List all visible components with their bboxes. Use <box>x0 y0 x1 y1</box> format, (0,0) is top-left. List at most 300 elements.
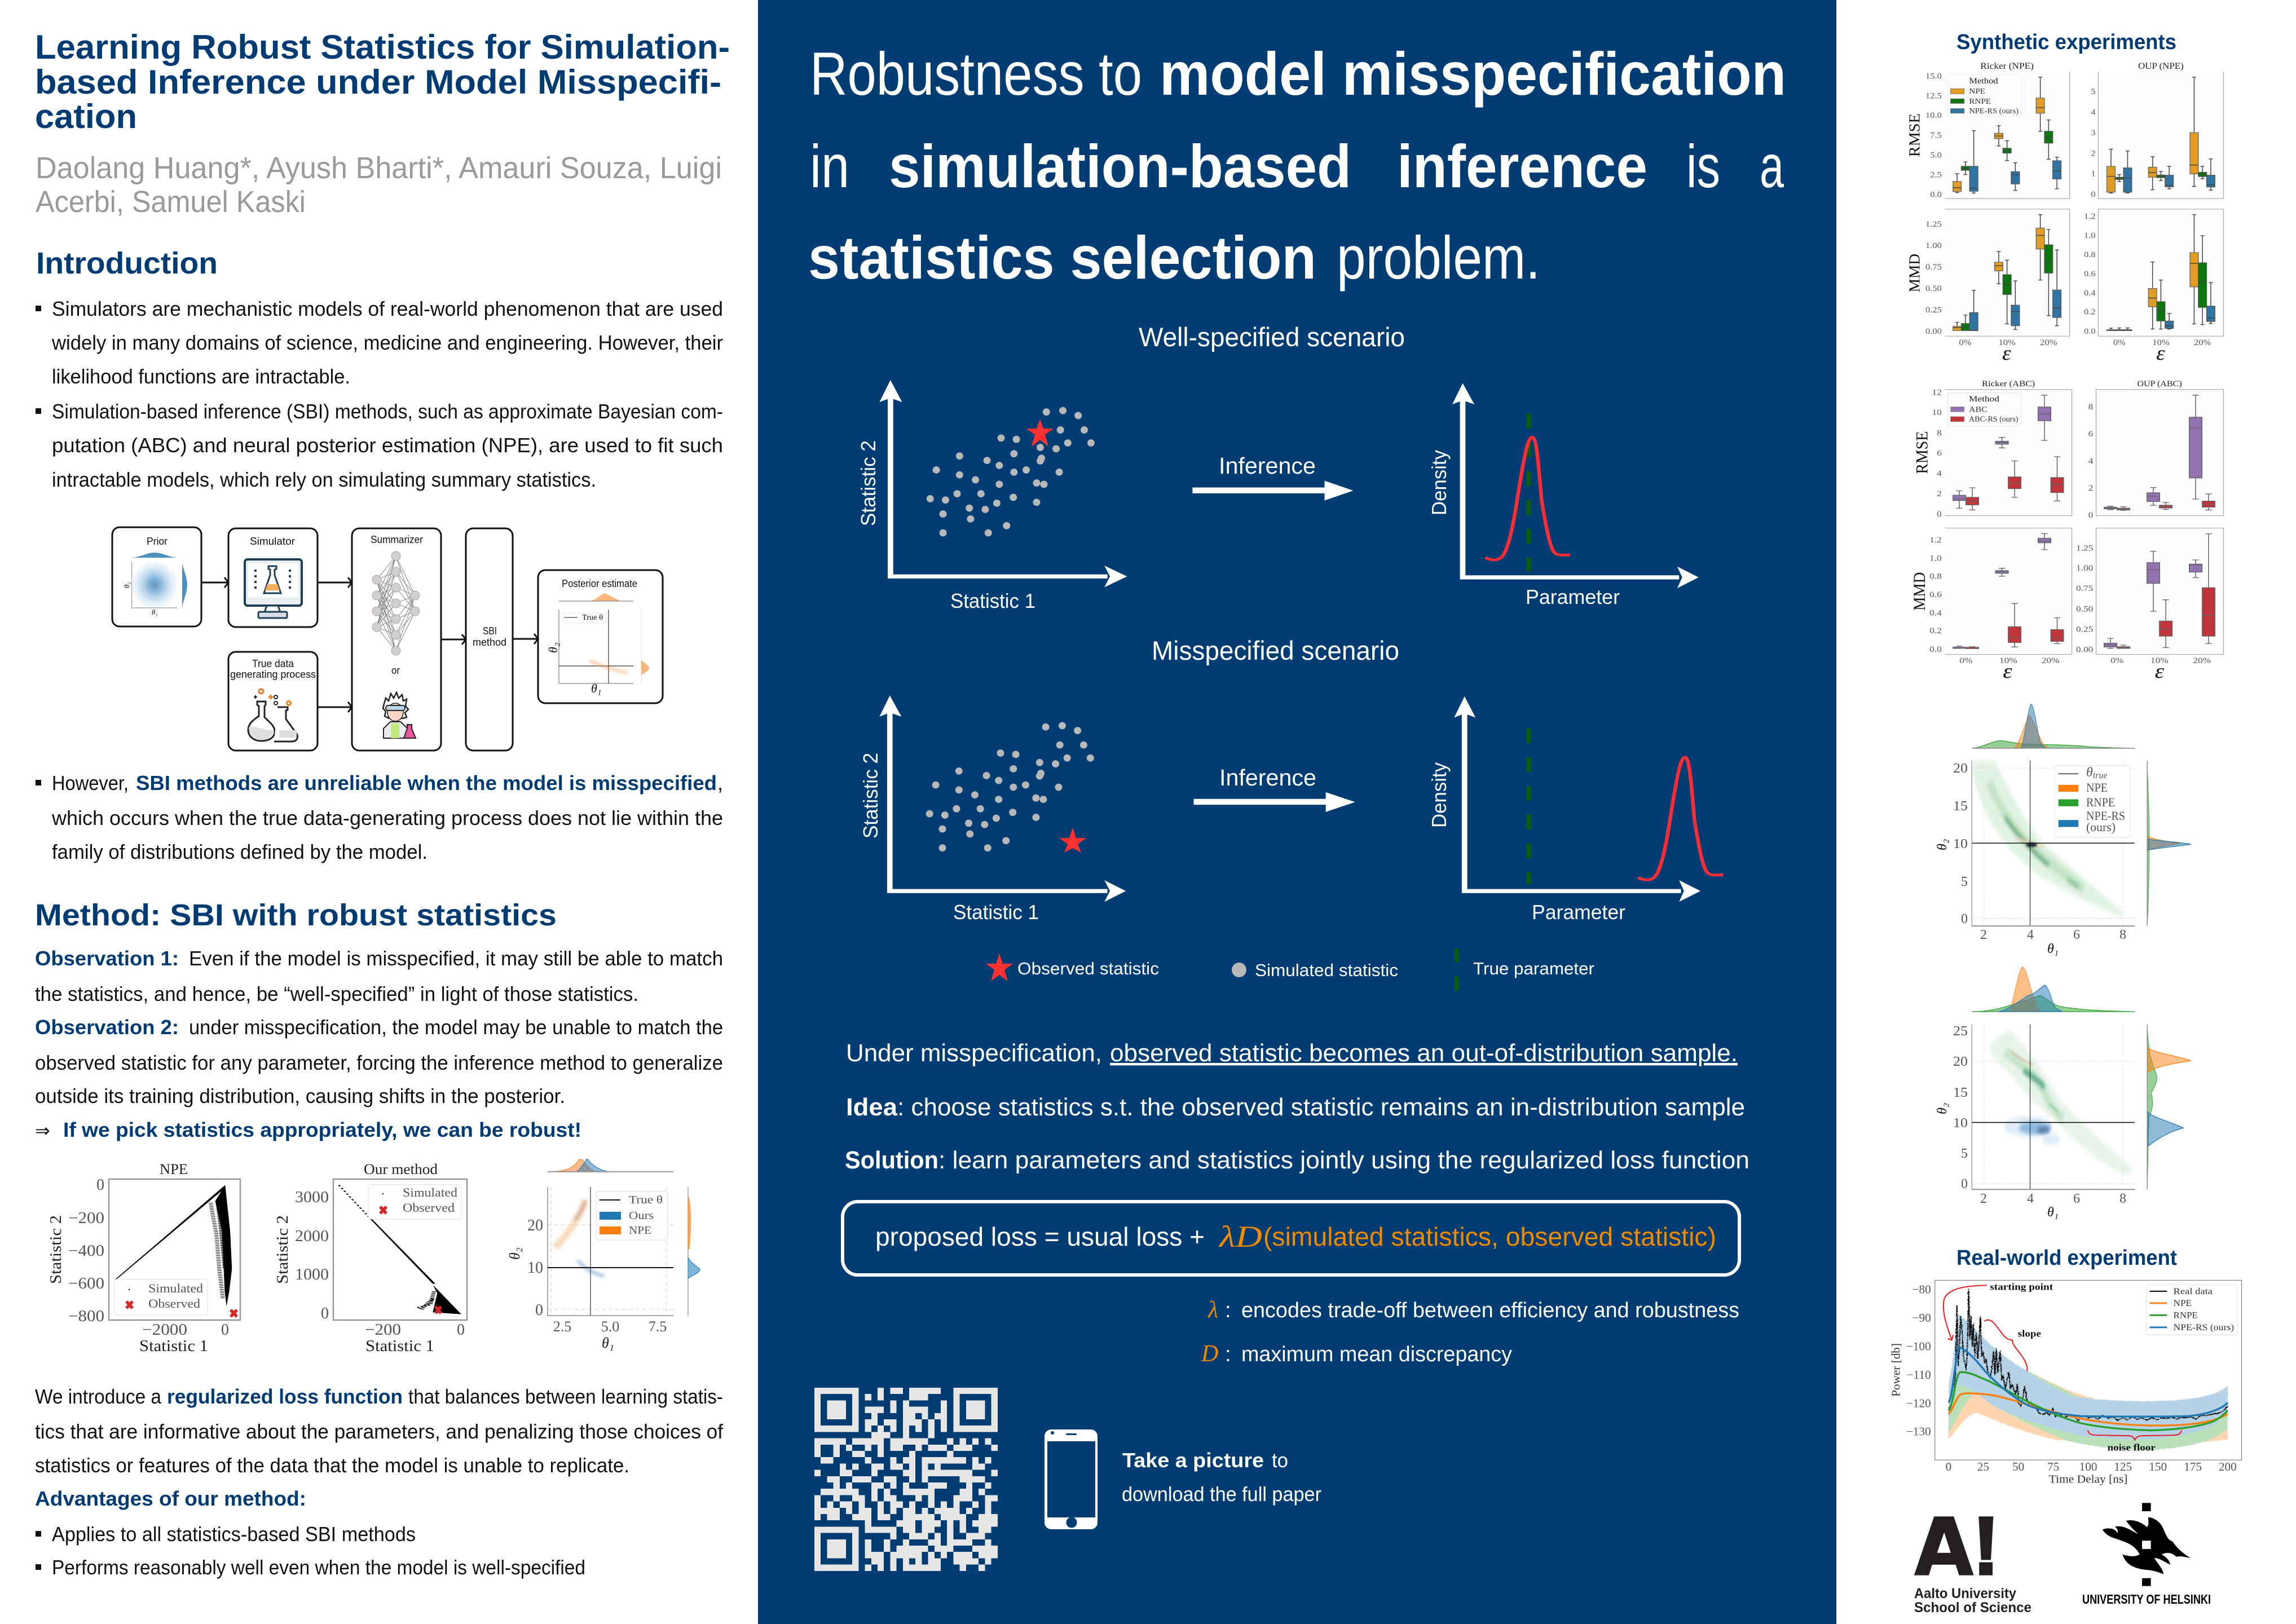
logo: University of Helsinki: UNIVERSITY OF HELSINKI <box>2082 1592 2211 1607</box>
chart: our method scatter: 1000 <box>295 1266 329 1283</box>
tick labels <box>1929 389 2211 665</box>
headline: inference <box>1397 132 1647 200</box>
axis labels: 125 <box>2114 1460 2132 1473</box>
logo: Aalto University: Aalto University <box>1914 1586 2016 1601</box>
titles and axis labels: ε <box>2002 343 2011 365</box>
chart: misspecified density: Parameter <box>1532 901 1625 924</box>
joint plot labels: 4 <box>2027 1191 2034 1206</box>
density contours <box>1990 1030 2134 1176</box>
annotation labels: starting point <box>1990 1282 2053 1292</box>
heading: real-world experiment: Real-world experiment <box>1956 1246 2177 1270</box>
text block: introduction bullets: Simulators are mechanistic models of real-world phenomenon that are used <box>52 297 723 320</box>
joint plot labels: θ₂ <box>1935 1103 1950 1114</box>
top marginal <box>1972 704 2135 748</box>
top marginal <box>1972 967 2135 1012</box>
axis labels: −130 <box>1906 1425 1931 1438</box>
chart: NPE scatter <box>47 1161 240 1355</box>
joint plot labels: 0 <box>1961 912 1968 926</box>
logo: University of Helsinki <box>2082 1503 2211 1607</box>
axis labels: −100 <box>1906 1340 1931 1353</box>
legend ABC <box>1948 392 2021 425</box>
tick labels: 4 <box>1937 469 1942 478</box>
headline: is <box>1686 132 1720 200</box>
text block: D explanation: : <box>1225 1343 1231 1366</box>
chart: joint plot well-specified <box>1935 704 2191 956</box>
text block: observations: the statistics, and hence, be “well-specified” in light of those statistics. <box>35 982 638 1005</box>
joint plot labels: 5 <box>1961 1146 1968 1161</box>
text block: advantages: Performs reasonably well even when the model is well-specified <box>52 1556 585 1579</box>
joint plot labels: 20 <box>1953 761 1968 776</box>
chart: NPE scatter: −400 <box>68 1242 104 1260</box>
text block: idea and solution <box>845 1039 1749 1174</box>
titles and axis labels: MMD <box>1910 572 1928 611</box>
axis labels: 200 <box>2219 1460 2237 1473</box>
text block: observations: Even if the model is misspecified, it may still be able to match <box>189 947 723 970</box>
chart: misspecified density: Density <box>1427 762 1451 828</box>
chart: NPE scatter: −2000 <box>142 1321 187 1339</box>
joint plot labels: 8 <box>2119 1191 2126 1206</box>
chart: NPE scatter: Statistic 1 <box>139 1338 208 1355</box>
title: Learning Robust Statistics for Simulation- <box>35 28 730 66</box>
panel: left column <box>35 28 730 1579</box>
axis labels: −90 <box>1912 1311 1931 1325</box>
joint plot labels: 4 <box>2027 928 2034 942</box>
chart: posterior estimate: True θ <box>582 614 603 622</box>
titles and axis labels: RMSE <box>1905 113 1923 157</box>
titles and axis labels: OUP (NPE) <box>2138 61 2184 71</box>
boxes NPE-RS <box>1969 161 2215 330</box>
legend ABC: Method <box>1969 395 1999 403</box>
joint plot labels: 15 <box>1953 799 1968 814</box>
titles and axis labels: ε <box>2155 661 2165 682</box>
chart: our method scatter: Our method <box>364 1161 438 1177</box>
tick labels: 10.0 <box>1925 111 1942 120</box>
tick labels: 0.0 <box>1930 190 1942 199</box>
chart: posterior joint plot: θ₁ <box>602 1335 614 1351</box>
joint plot labels: 15 <box>1953 1085 1968 1100</box>
tick labels: 8 <box>1937 429 1942 438</box>
tick labels: 10% <box>2150 656 2169 665</box>
text block: take a picture: to <box>1272 1449 1288 1472</box>
density contours <box>1973 761 2126 917</box>
logo: Aalto University <box>1914 1516 2031 1616</box>
tick labels: 1.25 <box>1925 220 1942 229</box>
axis labels: −110 <box>1907 1368 1931 1382</box>
marker: observed NPE <box>231 1310 237 1317</box>
whiskers <box>1956 395 2212 649</box>
text block: observations: outside its training distribution, causing shifts in the posterior. <box>35 1084 565 1107</box>
text block: take a picture: download the full paper <box>1122 1482 1321 1506</box>
tick labels: 0.8 <box>1929 572 1942 581</box>
NPE legend: Observed <box>148 1296 200 1310</box>
text block: D explanation: D <box>1201 1341 1218 1367</box>
chart: our method scatter: Statistic 1 <box>365 1338 434 1355</box>
text block: regularized loss: We introduce a <box>35 1385 162 1408</box>
tick labels: 1 <box>2091 169 2096 179</box>
legend NPE: RNPE <box>1969 97 1991 106</box>
chart: posterior estimate: θ₂ <box>546 642 560 653</box>
joint plot labels: 20 <box>1953 1054 1968 1069</box>
diagram boxes <box>112 527 663 751</box>
tick labels: 3 <box>2091 129 2096 138</box>
chart: misspecified statistics <box>859 695 1126 924</box>
diagram labels: or <box>391 665 400 676</box>
legend: NPE-RS (ours) <box>2174 1322 2234 1332</box>
tick labels: 0.0 <box>1929 645 1942 654</box>
chart: NPE scatter: −200 <box>68 1210 104 1227</box>
chart: our method scatter: 3000 <box>295 1189 329 1206</box>
tick labels: 5 <box>2091 87 2096 96</box>
chart: well-specified statistics: Statistic 2 <box>857 440 880 526</box>
diagram labels: method <box>473 637 506 648</box>
title: based Inference under Model Misspecifi- <box>35 63 721 101</box>
panels background <box>1945 72 2223 336</box>
tick labels: 1.00 <box>2076 564 2093 573</box>
tick labels: 12 <box>1932 389 1942 397</box>
titles and axis labels: MMD <box>1905 254 1923 292</box>
chart: well-specified statistics <box>857 380 1127 612</box>
joint plot legend: True θ <box>629 1194 663 1206</box>
joint plot labels: 6 <box>2073 928 2080 942</box>
text block: regularized loss: regularized loss function <box>167 1385 403 1408</box>
text block: unreliable under misspecification: family of distributions defined by the model. <box>52 840 428 863</box>
chart: NPE scatter: 0 <box>96 1176 104 1194</box>
tick labels: 0.50 <box>1925 284 1942 293</box>
joint plot labels: 5 <box>1961 875 1968 889</box>
tick labels: 0% <box>2110 656 2123 665</box>
heading: Introduction: Introduction <box>36 246 218 280</box>
text block: idea and solution: : learn parameters and statistics jointly using the regularized loss function <box>938 1146 1749 1174</box>
diagram arrows <box>201 577 538 712</box>
text block: introduction bullets: intractable models, which rely on simulating summary statistics. <box>52 468 596 491</box>
text block: idea and solution: : choose statistics s.t. the observed statistic remains an in-distribution sample <box>897 1093 1745 1121</box>
legend swatches <box>2055 766 2130 837</box>
tick labels: 1.0 <box>2084 231 2096 240</box>
boxes ABC <box>1953 407 2202 648</box>
titles and axis labels <box>1910 379 2182 682</box>
joint plot labels: true <box>2093 771 2108 780</box>
authors <box>36 151 722 219</box>
tick labels: 0.4 <box>2084 288 2096 298</box>
text block: idea and solution: observed statistic becomes an out-of-distribution sample. <box>1110 1039 1738 1067</box>
tick labels: 0 <box>2088 511 2093 520</box>
tick labels: 6 <box>2088 430 2093 439</box>
icon: phone <box>1045 1429 1098 1529</box>
tick labels: 0.4 <box>1929 608 1942 617</box>
tick labels: 6 <box>1937 449 1942 458</box>
arrow: inference misspecified: Inference <box>1219 765 1316 791</box>
legend: scenarios: True parameter <box>1473 959 1594 978</box>
line: RNPE <box>1949 1372 2228 1431</box>
chart: NPE scatter: Statistic 2 <box>47 1215 65 1284</box>
legend: scenarios: Observed statistic <box>1017 959 1159 978</box>
heading: misspecified scenario: Misspecified scenario <box>1152 636 1399 665</box>
callout: proposed loss <box>843 1202 1739 1275</box>
icon: prior density: θ₁ <box>152 608 158 616</box>
title <box>35 28 730 135</box>
tick labels: 10% <box>1999 656 2017 665</box>
titles and axis labels: OUP (ABC) <box>2137 379 2182 389</box>
chart: our method scatter <box>274 1161 467 1355</box>
text block: advantages: Advantages of our method: <box>35 1487 306 1510</box>
annotation labels <box>1990 1282 2156 1453</box>
NPE legend <box>114 1279 208 1315</box>
text block: observations: observed statistic for any parameter, forcing the inference method to generalize <box>35 1051 723 1074</box>
diagram labels: Posterior estimate <box>562 578 637 589</box>
our-method legend <box>368 1185 461 1219</box>
text block: take a picture <box>1122 1449 1321 1506</box>
tick labels: 0.2 <box>2084 307 2096 316</box>
tick labels: 0 <box>2091 190 2096 199</box>
icon: scientist <box>383 692 416 738</box>
legend NPE: NPE-RS (ours) <box>1969 107 2019 116</box>
chart: posterior joint plot: 5.0 <box>601 1318 619 1335</box>
text block: regularized loss <box>35 1385 724 1477</box>
legend NPE: NPE <box>1969 87 1985 96</box>
legend NPE <box>1948 75 2022 117</box>
tick labels: 0% <box>1959 656 1972 665</box>
heading: synthetic experiments: Synthetic experiments <box>1956 30 2176 54</box>
axis labels: Time Delay [ns] <box>2049 1473 2127 1485</box>
tick labels: 0.8 <box>2084 250 2096 259</box>
diagram labels: Simulator <box>250 536 295 547</box>
icon: lab flasks <box>248 689 297 742</box>
tick labels: 1.2 <box>1929 536 1942 545</box>
text block: unreliable under misspecification: which occurs when the true data-generating process does not lie within the <box>51 806 723 829</box>
diagram: SBI pipeline <box>112 527 663 751</box>
whiskers <box>1955 77 2213 330</box>
titles and axis labels: ε <box>2003 661 2013 682</box>
text block: lambda explanation: encodes trade-off between efficiency and robustness <box>1241 1299 1739 1322</box>
diagram labels: generating process <box>230 669 316 680</box>
axis labels <box>1890 1283 2237 1485</box>
chart: real-world power delay <box>1890 1281 2242 1485</box>
line: NPE <box>1949 1393 2228 1426</box>
joint plot labels: 10 <box>1953 1116 1968 1131</box>
chart: posterior joint plot: 20 <box>527 1217 543 1234</box>
joint plot labels: θ₁ <box>2047 942 2059 956</box>
arrow: inference misspecified <box>1194 765 1355 812</box>
diagram labels: SBI <box>483 625 497 637</box>
annotation labels: slope <box>2018 1329 2041 1339</box>
joint plot labels: θ <box>2086 765 2093 780</box>
text block: introduction bullets: putation (ABC) and neural posterior estimation (NPE), are used to fit such <box>52 434 723 457</box>
joint plot legend <box>596 1191 668 1240</box>
medians <box>1953 414 2215 647</box>
joint plot labels: 0 <box>1961 1177 1968 1191</box>
text block: introduction bullets: widely in many domains of science, medicine and engineering. However, their <box>51 331 723 354</box>
chart: ABC box plots <box>1910 379 2223 682</box>
chart: posterior estimate: θ₁ <box>591 681 601 695</box>
joint plot labels <box>1935 761 2126 956</box>
callout: proposed loss: (simulated statistics, observed statistic) <box>1263 1222 1716 1251</box>
headline: simulation-based <box>889 132 1351 200</box>
chart: our method scatter: 2000 <box>295 1228 329 1245</box>
authors: Acerbi, Samuel Kaski <box>36 185 306 219</box>
tick labels: 12.5 <box>1925 91 1942 100</box>
title: cation <box>35 98 137 135</box>
chart: posterior joint plot <box>506 1159 700 1351</box>
legend <box>2147 1285 2237 1335</box>
tick labels: 4 <box>2091 108 2096 117</box>
axis labels: 25 <box>1977 1460 1989 1473</box>
tick labels: 0.6 <box>1929 590 1942 599</box>
text block: observations: If we pick statistics appropriately, we can be robust! <box>63 1118 581 1141</box>
NPE legend: Simulated <box>148 1281 203 1295</box>
text block: observations: under misspecification, the model may be unable to match the <box>189 1016 723 1039</box>
joint plot labels: θ₁ <box>2047 1205 2059 1220</box>
titles and axis labels: ε <box>2156 343 2165 365</box>
joint plot labels: 25 <box>1953 1024 1968 1039</box>
tick labels: 4 <box>2088 457 2093 466</box>
boxes RNPE <box>1962 131 2207 330</box>
text block: advantages: Applies to all statistics-based SBI methods <box>52 1522 416 1546</box>
text block: unreliable under misspecification: However, <box>52 771 129 795</box>
headline <box>808 39 1786 292</box>
QR code <box>814 1388 998 1571</box>
tick labels: 0% <box>2113 338 2126 347</box>
axis labels: 175 <box>2184 1460 2202 1473</box>
tick labels: 0.2 <box>1929 626 1942 636</box>
text block: observations <box>35 947 723 1141</box>
legend ABC: ABC <box>1969 405 1987 414</box>
axis labels: 75 <box>2047 1460 2059 1473</box>
text block: observations: Observation 1: <box>35 947 179 970</box>
chart: well-specified statistics: Statistic 1 <box>950 589 1035 612</box>
text block: regularized loss: statistics or features of the data that the model is unable to replicate. <box>35 1454 629 1477</box>
legend: scenarios: Simulated statistic <box>1255 960 1398 980</box>
chart: misspecified statistics: Statistic 2 <box>859 753 882 839</box>
text block: idea and solution: Under misspecification, <box>846 1039 1102 1067</box>
headline: in <box>810 132 849 200</box>
legend: NPE <box>2174 1298 2192 1308</box>
tick labels: 15.0 <box>1925 72 1942 81</box>
diagram labels: Summarizer <box>371 534 423 545</box>
arrow: inference well-specified <box>1192 453 1353 501</box>
headline: statistics selection <box>808 223 1316 292</box>
text block: idea and solution: Solution <box>845 1146 938 1174</box>
annotations <box>1944 1285 2182 1441</box>
joint plot labels: 10 <box>1953 837 1968 851</box>
text block: take a picture: Take a picture <box>1122 1449 1264 1472</box>
our-method legend: Observed <box>403 1201 455 1215</box>
icon: simulator monitor <box>245 559 302 618</box>
headline: Robustness to <box>810 39 1142 108</box>
chart: well-specified density: Parameter <box>1526 585 1620 608</box>
headline: a <box>1760 132 1784 200</box>
joint plot labels: (ours) <box>2086 820 2116 834</box>
tick labels: 0.00 <box>2076 646 2093 654</box>
annotation labels: noise floor <box>2107 1442 2156 1453</box>
chart: our method scatter: −200 <box>365 1321 401 1339</box>
logo: Aalto University: School of Science <box>1914 1600 2031 1616</box>
marker: observed ours <box>435 1307 441 1313</box>
icon: prior density: θ₂ <box>122 582 131 588</box>
chart: NPE scatter: −600 <box>68 1275 104 1292</box>
text block: introduction bullets: likelihood functions are intractable. <box>52 365 350 388</box>
text block: introduction bullets: Simulation-based inference (SBI) methods, such as approximate Bayesian com- <box>52 400 723 423</box>
chart: posterior joint plot: 2.5 <box>553 1318 571 1335</box>
tick labels: 10% <box>1999 338 2016 347</box>
chart: our method scatter: 0 <box>457 1321 465 1339</box>
text block: unreliable under misspecification: , <box>717 771 723 795</box>
tick labels: 0.50 <box>2076 604 2093 614</box>
chart: our method scatter: 0 <box>321 1305 329 1322</box>
chart: posterior joint plot: θ₂ <box>506 1247 523 1260</box>
chart: NPE scatter: NPE <box>160 1161 188 1177</box>
tick labels: 2 <box>2088 484 2093 493</box>
icon: neural network <box>372 551 420 655</box>
text block: advantages <box>35 1487 585 1579</box>
chart: NPE scatter: 0 <box>221 1321 229 1339</box>
tick labels: 1.0 <box>1929 554 1942 563</box>
panel: right column <box>1890 30 2242 1616</box>
text block: regularized loss: tics that are informative about the parameters, and penalizing those choices of <box>35 1420 724 1443</box>
joint plot labels: 8 <box>2119 928 2126 942</box>
NPE scatter points <box>116 1185 232 1307</box>
titles and axis labels: RMSE <box>1913 431 1931 474</box>
our-method scatter points <box>339 1185 461 1314</box>
tick labels: 8 <box>2088 403 2093 412</box>
tick labels: 0.0 <box>2084 326 2096 336</box>
authors: Daolang Huang*, Ayush Bharti*, Amauri Souza, Luigi <box>36 151 722 185</box>
panels background <box>1945 390 2223 655</box>
text block: unreliable under misspecification: SBI methods are unreliable when the model is misspecified <box>136 771 717 795</box>
chart: well-specified density: Density <box>1427 450 1451 515</box>
icon: prior density <box>122 553 187 616</box>
joint plot labels: NPE-RS <box>2086 809 2125 823</box>
joint plot labels: RNPE <box>2086 795 2115 809</box>
legend: RNPE <box>2174 1310 2198 1320</box>
text block: lambda explanation: : <box>1225 1299 1231 1322</box>
tick labels: 0 <box>1937 510 1942 519</box>
callout: proposed loss: λD <box>1218 1220 1262 1254</box>
text block: unreliable under misspecification <box>36 771 723 863</box>
axis labels: −80 <box>1912 1283 1931 1296</box>
axis labels: 150 <box>2149 1460 2167 1473</box>
joint plot labels: 2 <box>1980 928 1987 942</box>
callout: proposed loss: proposed loss = usual loss + <box>875 1222 1205 1251</box>
text block: idea and solution: Idea <box>846 1093 898 1121</box>
legend ABC: ABC-RS (ours) <box>1969 416 2019 423</box>
joint plot legend: Ours <box>629 1210 654 1222</box>
joint plot legend: NPE <box>629 1224 651 1237</box>
headline: model misspecification <box>1160 39 1786 108</box>
tick labels: 0.6 <box>2084 270 2096 279</box>
arrow: inference well-specified: Inference <box>1219 453 1316 479</box>
tick labels: 10% <box>2152 338 2170 347</box>
tick labels: 2 <box>1937 489 1942 498</box>
diagram labels <box>147 534 637 680</box>
panel: center column <box>758 0 1836 1624</box>
text block: introduction bullets <box>36 297 723 491</box>
text block: regularized loss: that balances between learning statis- <box>408 1385 723 1408</box>
text block: D explanation: maximum mean discrepancy <box>1241 1343 1512 1366</box>
diagram labels: Prior <box>147 536 168 547</box>
chart: NPE scatter: −800 <box>68 1308 104 1325</box>
titles and axis labels: Ricker (NPE) <box>1980 61 2034 71</box>
joint plot labels: NPE <box>2086 780 2108 795</box>
tick labels: 0.75 <box>2076 584 2093 593</box>
tick labels: 1.25 <box>2076 544 2093 553</box>
legend NPE: Method <box>1969 76 1998 86</box>
heading: well-specified scenario: Well-specified scenario <box>1139 322 1405 352</box>
chart: our method scatter: Statistic 2 <box>274 1215 292 1284</box>
boxes NPE <box>1953 98 2198 330</box>
tick labels: 1.2 <box>2084 211 2096 221</box>
chart: posterior joint plot: 0 <box>535 1301 543 1319</box>
tick labels: 7.5 <box>1930 131 1942 140</box>
